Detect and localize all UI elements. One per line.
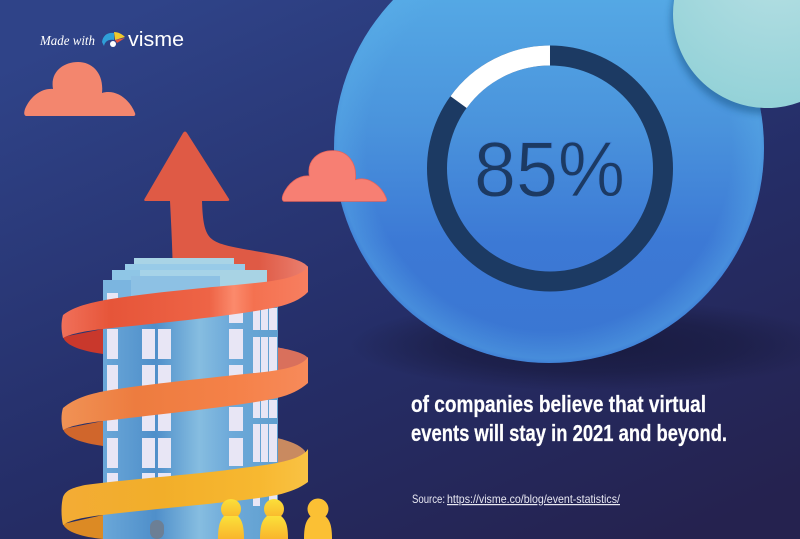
icon: visme mark xyxy=(102,32,125,47)
orange ribbon xyxy=(62,357,308,446)
source line xyxy=(412,492,621,506)
ribbon front xyxy=(62,449,308,525)
people figures xyxy=(218,498,332,539)
figure 1 xyxy=(218,499,244,539)
donut chart: 85% xyxy=(437,56,663,282)
statement text xyxy=(411,391,727,446)
made with script text: Made with xyxy=(39,34,95,49)
cloud left xyxy=(24,62,135,116)
shadow of teal circle xyxy=(668,0,762,118)
back of yellow ribbon xyxy=(277,438,305,470)
percentage value: 85% xyxy=(474,125,625,213)
shadow under big circle xyxy=(350,299,800,391)
ring track (85%) xyxy=(437,56,663,282)
windows xyxy=(107,293,277,506)
ring white segment (15%) xyxy=(459,56,550,102)
figure 3 xyxy=(304,498,332,539)
ribbon underside xyxy=(63,329,103,354)
red arrow xyxy=(144,132,308,310)
statement line 1: of companies believe that virtual xyxy=(411,391,706,417)
logo: Made with visme xyxy=(39,29,184,51)
building xyxy=(103,258,278,539)
stepped roof xyxy=(103,258,267,300)
ribbon underside xyxy=(63,515,103,539)
big blue circle xyxy=(334,0,764,363)
cloud right xyxy=(282,151,387,201)
entrance door xyxy=(150,520,164,539)
yellow ribbon xyxy=(62,449,308,539)
figure 2 xyxy=(260,499,288,539)
tower body xyxy=(103,295,278,539)
teal circle xyxy=(673,0,800,108)
visme wordmark: visme xyxy=(128,29,184,51)
red ribbon xyxy=(62,266,308,354)
ribbon underside xyxy=(63,421,103,446)
source link: https://visme.co/blog/event-statistics/ xyxy=(447,492,621,506)
ribbon front xyxy=(62,357,308,430)
ribbon front xyxy=(62,266,308,338)
back of orange ribbon xyxy=(276,347,308,372)
source label: Source: xyxy=(412,492,445,506)
